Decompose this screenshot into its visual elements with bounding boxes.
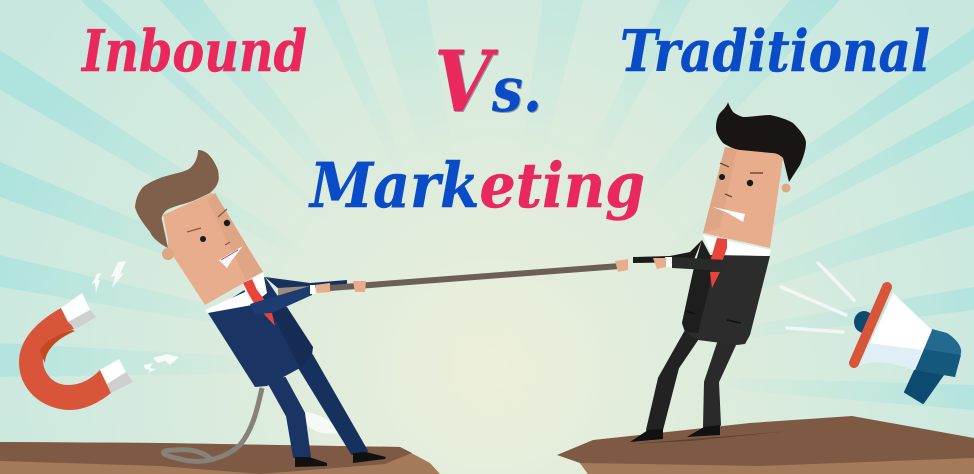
- title: Traditional: Traditional: [620, 18, 930, 85]
- title: Inbound: Inbound: [80, 18, 307, 85]
- rope: [330, 266, 620, 288]
- figure: left businessman: [135, 150, 386, 467]
- title: Vs.: Vs.: [434, 32, 542, 131]
- icon: megaphone: [854, 287, 961, 403]
- icon: lightning sparks: [92, 261, 179, 374]
- figure: right businessman: [615, 102, 806, 442]
- left hand on rope: [353, 281, 366, 292]
- title: Marketing: Marketing: [308, 149, 645, 222]
- ground: left cliff: [0, 442, 440, 474]
- icon: sound lines: [781, 263, 854, 332]
- icon: magnet: [19, 293, 133, 410]
- ground: right cliff: [557, 416, 974, 474]
